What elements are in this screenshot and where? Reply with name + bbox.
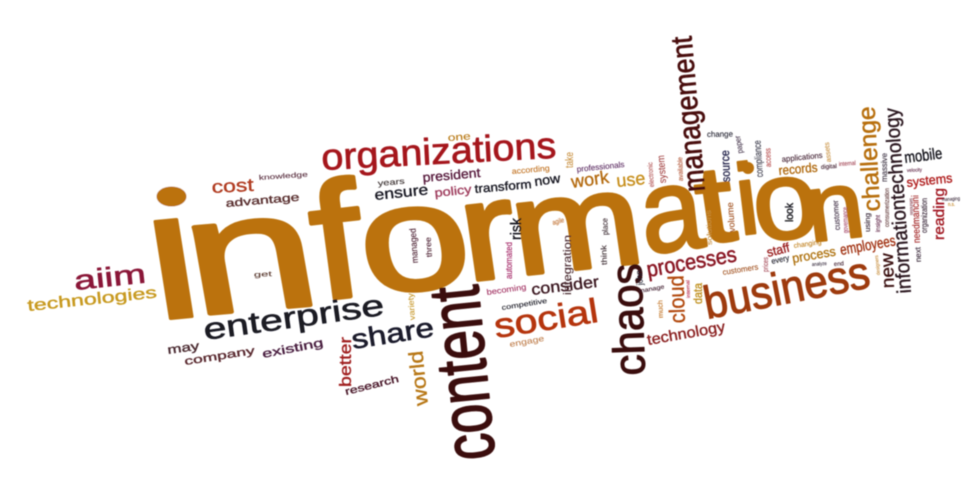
medium words: cloud	[663, 275, 690, 324]
medium words: look	[784, 203, 796, 222]
small words: system	[656, 155, 669, 184]
small words: digital	[821, 164, 837, 171]
word: management: management	[665, 34, 712, 193]
medium words: existing	[261, 335, 324, 361]
medium words: transform	[474, 177, 532, 196]
small words: volume	[725, 202, 737, 233]
medium words: now	[533, 170, 562, 189]
main word: information: n	[176, 151, 329, 350]
small words: engage	[509, 334, 546, 349]
small words: one	[447, 131, 472, 144]
small words	[254, 130, 960, 349]
small words: internal	[685, 280, 692, 298]
main word: information: r	[452, 148, 525, 311]
small words: professionals	[576, 160, 625, 174]
small words: managed	[408, 228, 420, 264]
medium words: mobile	[903, 145, 943, 167]
small words: integration	[562, 235, 574, 295]
medium words: may	[166, 339, 200, 357]
small words: applications	[781, 151, 823, 164]
small words: customer	[831, 200, 842, 230]
small words: change	[707, 130, 734, 139]
medium words: systems	[906, 170, 954, 190]
small words: resources	[908, 198, 915, 215]
small words: compliance	[752, 140, 766, 178]
word: technologies: technologies	[27, 284, 158, 315]
main word: information: a	[632, 141, 710, 280]
medium words: ensure	[374, 181, 429, 204]
word: enterprise: enterprise	[201, 289, 386, 347]
word: content: content	[414, 282, 511, 464]
small words: managing	[942, 196, 960, 203]
medium words: use	[615, 168, 646, 191]
medium words: new	[877, 252, 898, 289]
small words: next	[913, 246, 923, 262]
main word: information: i	[729, 143, 765, 257]
medium words: better	[336, 337, 355, 387]
medium words: policy	[434, 182, 472, 200]
word: chaos: chaos	[602, 263, 655, 376]
small words: access	[763, 148, 773, 167]
small words: paper	[733, 135, 745, 154]
small words: much	[657, 300, 665, 318]
small words: consumerization	[885, 188, 891, 227]
small words: john	[634, 270, 645, 287]
main word: information: o	[350, 146, 480, 326]
medium words: president	[422, 165, 481, 185]
small words: manage	[638, 284, 666, 295]
medium words: staff	[765, 240, 791, 260]
small words: end	[834, 261, 844, 268]
medium words: source	[718, 150, 733, 182]
medium words: employees	[839, 232, 897, 259]
small words: get	[254, 271, 272, 279]
small words: assets	[824, 141, 833, 163]
small words: knowledge	[259, 172, 308, 182]
small words: take	[564, 152, 576, 168]
small words: analyze	[812, 261, 827, 268]
word: informationtechnology: informationtechnology	[881, 107, 916, 294]
word: social: social	[491, 292, 601, 346]
main word: information: n	[800, 150, 870, 263]
small words: prices	[763, 257, 770, 272]
small words: governance	[842, 207, 850, 233]
word: business: business	[699, 246, 874, 329]
main word: information: o	[745, 134, 825, 266]
main word: information	[135, 134, 870, 360]
small words: variety	[406, 293, 417, 320]
medium words: research	[344, 374, 400, 398]
small words: three	[424, 236, 434, 257]
small words: customers	[722, 262, 759, 277]
small words: designers	[874, 254, 882, 275]
main word: information: t	[690, 141, 742, 266]
medium words: consider	[530, 274, 601, 299]
small words: using	[865, 213, 872, 232]
small words: years	[377, 177, 405, 188]
medium words: risk	[508, 218, 525, 240]
word: processes: processes	[645, 242, 738, 282]
medium words: records	[778, 160, 819, 178]
medium words	[166, 145, 954, 408]
medium words: cost	[211, 175, 254, 197]
small words: n.s.	[948, 202, 955, 208]
word: challenge: challenge	[854, 106, 886, 212]
small words: available	[677, 157, 685, 181]
small words: automated	[504, 242, 514, 279]
small words: solutions	[706, 209, 714, 245]
small words: place	[600, 217, 610, 235]
medium words: work	[569, 167, 611, 192]
small words: organization	[920, 198, 929, 233]
small words: according	[511, 164, 550, 176]
medium words: data	[691, 283, 705, 304]
small words: needmancini	[910, 195, 923, 243]
word: organizations: organizations	[320, 125, 557, 178]
small words: velocity	[907, 167, 923, 174]
small words: becoming	[486, 283, 527, 297]
small words: insight	[876, 215, 882, 232]
small words: agile	[552, 217, 565, 227]
word: aiim: aiim	[72, 259, 147, 296]
main word: information: i	[135, 149, 212, 360]
word: share: share	[349, 312, 436, 355]
small words: electronic	[647, 162, 656, 187]
main word: information: m	[503, 141, 650, 303]
small words: every	[771, 253, 790, 266]
small words: internal	[839, 161, 856, 168]
small words: think	[599, 244, 609, 265]
small words: changing	[793, 239, 822, 250]
medium words: world	[405, 350, 433, 408]
medium words: reading	[931, 188, 948, 240]
small words: massive	[880, 152, 889, 182]
medium words: process	[791, 243, 837, 266]
medium words: company	[184, 345, 256, 368]
main word: information: f	[301, 146, 374, 335]
medium words: technology	[646, 318, 727, 349]
medium words: advantage	[225, 192, 300, 210]
small words: competitive	[501, 298, 548, 312]
